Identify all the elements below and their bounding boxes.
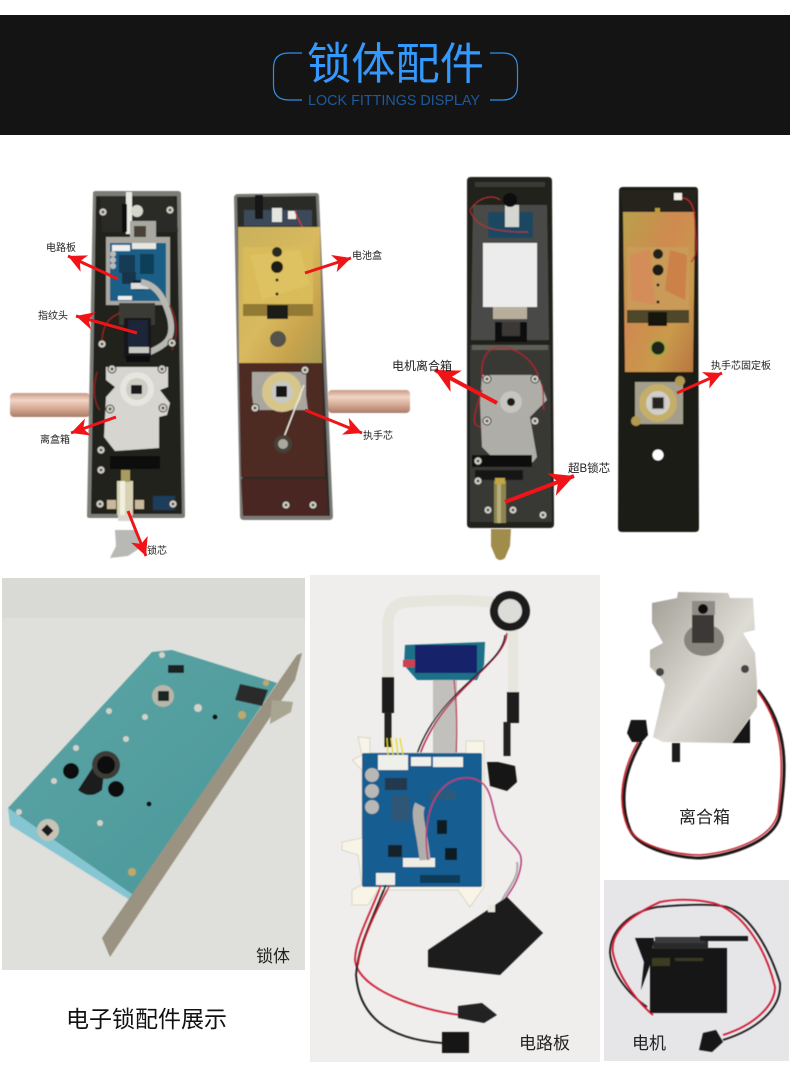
fingerprint module — [428, 897, 543, 975]
caption: motor: 电机 — [632, 1034, 666, 1053]
orange plate — [623, 212, 695, 372]
wires — [610, 905, 780, 1040]
header banner — [0, 15, 790, 135]
caption: circuit board: 电路板 — [519, 1034, 570, 1053]
circuit board — [106, 237, 170, 305]
connector — [627, 720, 648, 742]
label: fingerprint head: 指纹头 — [38, 309, 68, 322]
bracket — [631, 376, 685, 426]
battery box — [243, 247, 313, 319]
label: battery box: 电池盒 — [352, 249, 382, 262]
heat shrink — [388, 677, 513, 723]
title bracket left — [274, 53, 302, 100]
fingerprint module — [119, 303, 155, 362]
white cable — [388, 600, 498, 680]
arrow: clutch box — [71, 417, 116, 433]
label: handle core fixing plate: 执手芯固定板 — [711, 359, 771, 372]
power wires — [355, 885, 460, 1015]
black corner — [732, 718, 750, 743]
label: super B lock core: 超B锁芯 — [568, 461, 610, 475]
metal plate — [650, 592, 757, 743]
caption: clutch box: 离合箱 — [679, 808, 730, 827]
arrow: motor clutch box — [435, 370, 497, 403]
photo: lock body — [2, 578, 305, 970]
clutch plate — [480, 375, 547, 462]
arrow: handle core fixing plate — [677, 373, 722, 393]
connector — [699, 1030, 723, 1052]
output shaft — [692, 605, 714, 643]
arrow: fingerprint head — [76, 316, 137, 333]
subtitle: LOCK FITTINGS DISPLAY — [308, 92, 480, 109]
square spindle hole — [152, 685, 174, 707]
photo: lock panel 4 back plate — [618, 187, 699, 532]
super B lock cylinder — [491, 478, 511, 560]
side connector — [487, 762, 517, 791]
faceplate — [102, 653, 302, 957]
lock cylinder — [110, 470, 140, 558]
photo: lock panel 1 interior — [10, 191, 185, 558]
arrow: lock core — [128, 511, 146, 556]
caption: lock body: 锁体 — [256, 947, 290, 966]
clutch box plate — [104, 365, 170, 451]
label: lock core: 锁芯 — [147, 544, 167, 557]
handle core bracket — [251, 366, 309, 453]
white battery area — [483, 243, 537, 307]
label: handle core: 执手芯 — [363, 429, 393, 442]
photo: circuit board assembly — [310, 575, 600, 1062]
arrow: circuit board — [68, 256, 118, 279]
main PCB — [362, 738, 482, 887]
battery cover — [627, 247, 689, 326]
lock body case — [8, 650, 277, 895]
red wire — [474, 347, 544, 427]
connectors — [458, 1003, 497, 1023]
keyhole — [78, 764, 105, 795]
title bracket right — [490, 53, 518, 100]
LCD display — [403, 642, 485, 680]
ribbon cable — [433, 680, 457, 756]
speaker — [490, 591, 530, 631]
white holder — [342, 737, 484, 907]
arrow: battery box — [305, 258, 351, 273]
wire — [624, 690, 784, 858]
heading: accessories display: 电子锁配件展示 — [66, 1006, 227, 1032]
photo: lock panel 3 interior — [467, 177, 554, 560]
photo: motor — [604, 880, 789, 1061]
photo: clutch box — [622, 592, 784, 858]
brown plate — [239, 363, 325, 477]
title: 锁体配件 — [307, 40, 484, 89]
gold plate — [238, 227, 322, 363]
display board — [470, 193, 533, 238]
pink wire — [426, 778, 521, 905]
arrow: super B lock core — [505, 476, 574, 502]
arrow: handle core — [305, 410, 362, 433]
label: motor clutch box: 电机离合箱 — [392, 358, 452, 373]
label: clutch box: 离盒箱 — [40, 433, 70, 446]
motor body — [650, 948, 727, 1013]
photo: lock panel 2 back plate — [234, 193, 410, 520]
bolts — [270, 700, 293, 724]
label: circuit board: 电路板 — [46, 241, 76, 254]
